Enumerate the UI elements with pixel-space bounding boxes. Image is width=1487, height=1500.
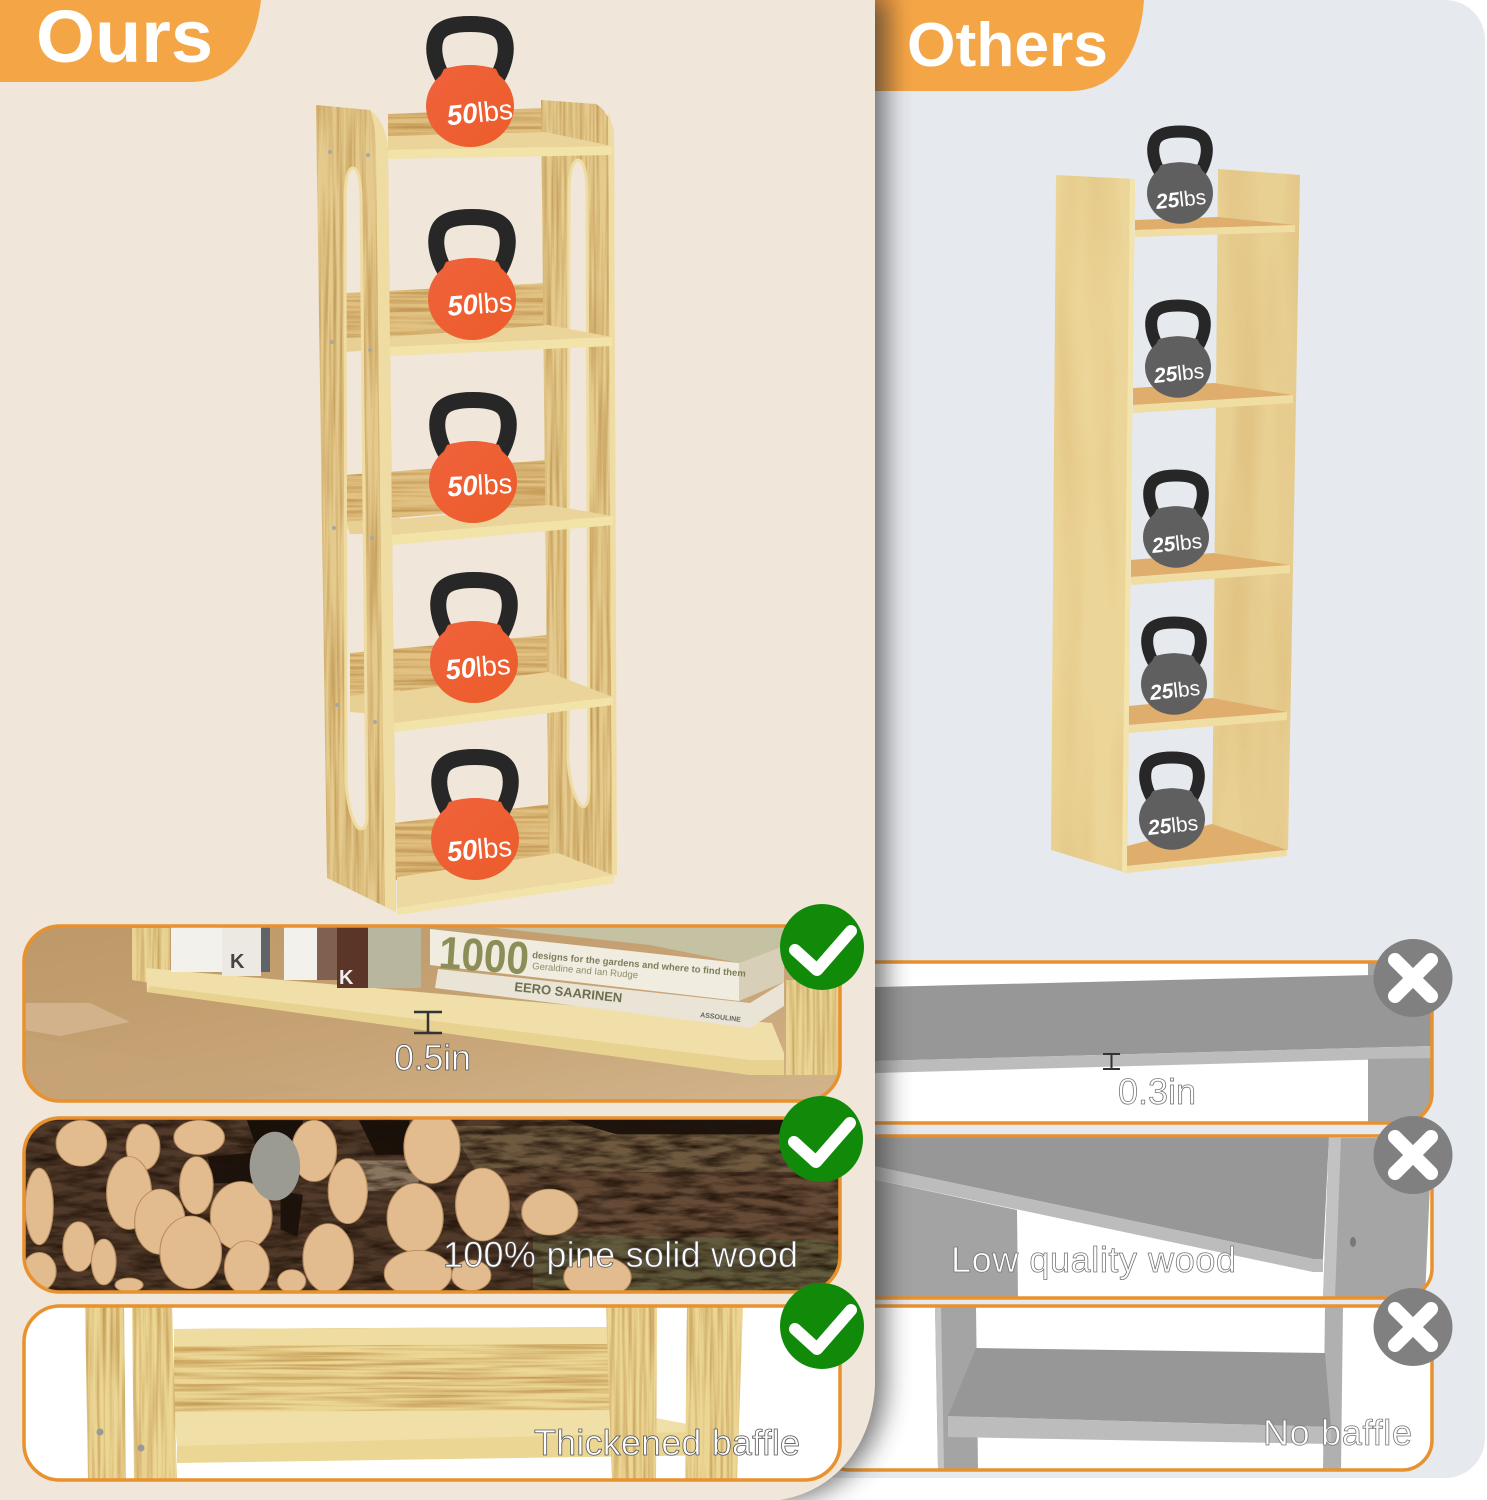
kettlebell 50lbs third: 50lbs <box>446 468 513 502</box>
photo: small books <box>171 926 222 972</box>
kettlebell 25lbs third: 25lbs <box>1150 530 1203 558</box>
shelves <box>1135 217 1295 230</box>
kettlebell 50lbs fourth <box>430 580 518 703</box>
kettlebell 25lbs fifth <box>1139 758 1205 850</box>
detail panel: others thin shelf 0.3in <box>840 962 1432 1123</box>
caption: 0.5in: 0.5in <box>394 1037 471 1078</box>
side panel <box>1051 175 1135 873</box>
panel: others tab <box>875 0 1144 91</box>
panel shadow <box>10 0 885 1500</box>
photo: legs <box>85 1306 743 1480</box>
left side panel <box>316 105 396 912</box>
shelf surfaces <box>388 132 612 150</box>
kettlebell 50lbs fourth: 50lbs <box>444 649 512 685</box>
kettlebell 50lbs second: 50lbs <box>446 286 513 322</box>
badge: cross one <box>1374 939 1452 1017</box>
badge: check one <box>780 904 864 990</box>
caption: thickened baffle: Thickened baffle <box>534 1422 800 1463</box>
kettlebell 50lbs top: 50lbs <box>445 94 514 131</box>
detail panel: ours thick shelf 0.5in <box>24 926 840 1101</box>
kettlebell 25lbs fourth <box>1141 622 1207 715</box>
photo: stacked books <box>478 926 784 963</box>
caption: low quality wood: Low quality wood <box>951 1239 1236 1280</box>
kettlebell 25lbs fourth: 25lbs <box>1148 677 1201 705</box>
photo: log bark <box>208 1118 841 1291</box>
detail panel: ours thick shelf 0.5in: Geraldine and Ian Rudge <box>532 961 638 981</box>
right side panel <box>541 100 616 890</box>
detail panel: ours thickened baffle <box>24 1306 840 1480</box>
badge: check three <box>780 1283 864 1369</box>
detail panel: ours thick shelf 0.5in: ASSOULINE <box>700 1012 741 1024</box>
back panel <box>1212 169 1300 855</box>
heading: others: Others <box>907 11 1108 80</box>
baffles <box>345 108 560 880</box>
screws <box>328 150 377 724</box>
kettlebell 25lbs third <box>1143 476 1209 568</box>
kettlebell 25lbs second <box>1145 306 1211 398</box>
illustration: others shelf <box>1051 132 1300 873</box>
kettlebell 25lbs fifth: 25lbs <box>1146 812 1199 840</box>
badge: check two <box>779 1096 863 1182</box>
detail panel: others low quality wood <box>840 1136 1432 1298</box>
photo: shelf <box>174 1410 725 1446</box>
caption: no baffle: No baffle <box>1263 1412 1412 1453</box>
caption: 100% pine solid wood: 100% pine solid wood <box>443 1234 798 1275</box>
badge: cross two <box>1374 1116 1452 1194</box>
badge: cross three <box>1374 1288 1452 1366</box>
icon: thickness marker <box>414 1012 442 1033</box>
detail panel: ours thick shelf 0.5in: K <box>339 967 354 989</box>
detail panel: ours thick shelf 0.5in: designs for the gardens and where to find them <box>532 950 746 980</box>
detail panel: ours thick shelf 0.5in: EERO SAARINEN <box>514 979 623 1005</box>
panel: ours tab <box>0 0 261 82</box>
photo: floor <box>24 926 840 1101</box>
detail panel: others no baffle <box>820 1306 1432 1470</box>
photo: baffle <box>174 1327 612 1415</box>
illustration: ours shelf <box>316 24 617 915</box>
kettlebell 50lbs third <box>429 400 517 523</box>
photo: shelf base <box>132 928 170 986</box>
panel: ours background <box>0 0 875 1500</box>
detail panel: ours solid pine logs <box>22 1111 841 1298</box>
icon: thickness marker <box>1103 1054 1120 1069</box>
detail panel: ours thick shelf 0.5in: K <box>230 951 245 973</box>
under surfaces <box>345 336 400 352</box>
kettlebell 25lbs top <box>1147 132 1213 224</box>
panel: others background <box>800 0 1485 1478</box>
detail panel: ours thick shelf 0.5in: 1000 <box>437 926 531 984</box>
kettlebell 25lbs second: 25lbs <box>1152 360 1205 388</box>
photo: log faces <box>22 1111 631 1298</box>
kettlebell 50lbs top <box>426 24 514 147</box>
kettlebell 25lbs top: 25lbs <box>1154 186 1207 214</box>
kettlebell 50lbs second <box>428 217 516 340</box>
kettlebell 50lbs fifth <box>431 757 519 880</box>
shelf front edges <box>388 146 612 159</box>
caption: 0.3in: 0.3in <box>1118 1071 1196 1112</box>
kettlebell 50lbs fifth: 50lbs <box>446 831 513 867</box>
